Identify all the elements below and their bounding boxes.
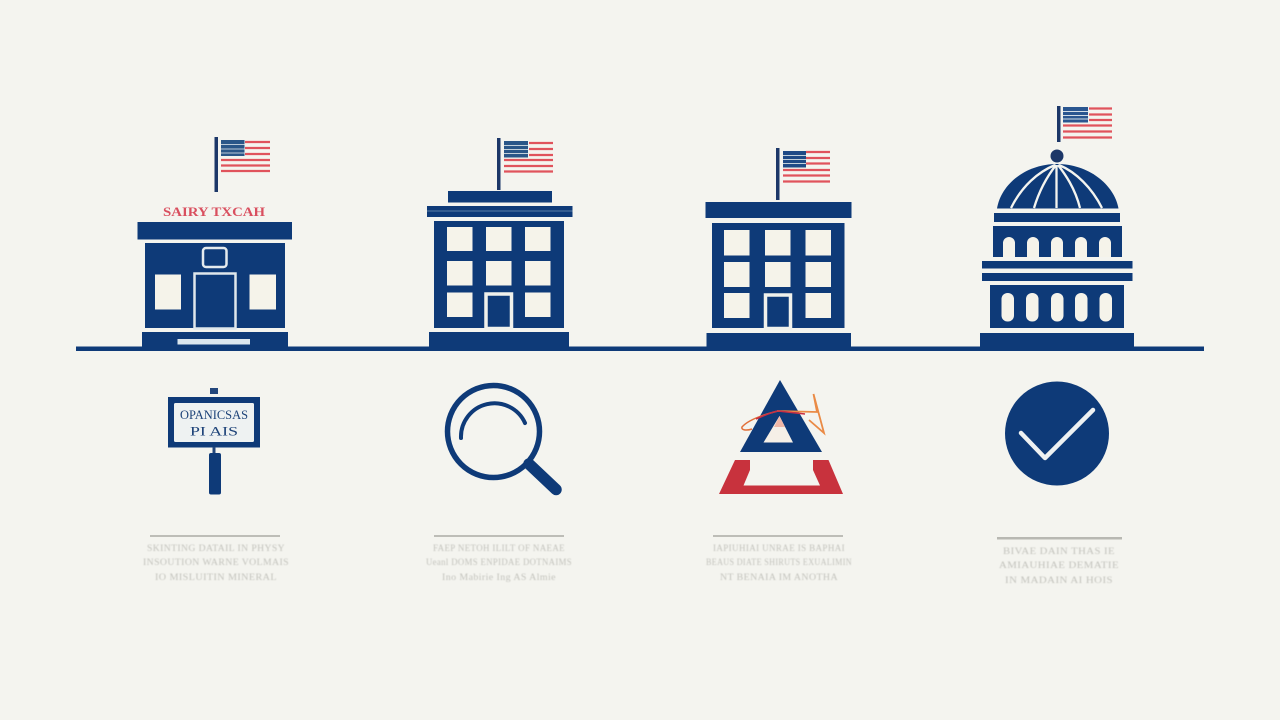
base xyxy=(706,333,851,351)
building 2: office with upper roof tier xyxy=(427,138,572,351)
right window xyxy=(250,274,276,310)
windows xyxy=(724,230,831,318)
door xyxy=(486,294,512,328)
icon: magnifying glass xyxy=(448,386,556,490)
facade xyxy=(712,223,844,328)
icon: signpost: PI AIS xyxy=(190,424,238,438)
flag 4 xyxy=(1063,107,1112,138)
caption 4: IN MADAIN AI HOIS xyxy=(1005,576,1113,586)
icon: check mark badge xyxy=(1005,382,1109,486)
icon: triangle with red base xyxy=(719,380,843,494)
caption 1: IO MISLUITIN MINERAL xyxy=(155,573,277,583)
building 3: office with flat roof xyxy=(706,148,852,351)
signpost text: OPANICSAS xyxy=(180,407,248,422)
flag pole 2 xyxy=(497,138,500,190)
caption 4: AMIAUHIAE DEMATIE xyxy=(999,561,1119,571)
red building sign text: SAIRY TXCAH xyxy=(163,204,265,219)
caption 3: NT BENAIA IM ANOTHA xyxy=(720,573,838,583)
facade xyxy=(145,243,285,328)
caption 2: Ino Mabirie Ing AS Almie xyxy=(442,573,556,583)
caption 1: SKINTING DATAIL IN PHYSY xyxy=(147,544,285,554)
upper arcade xyxy=(993,226,1122,257)
dome band xyxy=(994,213,1120,222)
roof xyxy=(427,206,572,217)
flag pole 4 xyxy=(1057,106,1060,142)
flag pole 3 xyxy=(776,148,780,200)
roof xyxy=(706,202,852,218)
caption 2: Ueanl DOMS ENPIDAE DOTNAIMS xyxy=(426,558,572,568)
flag 1 xyxy=(221,140,270,171)
caption 3: BEAUS DIATE SHIRUTS EXUALIMIN xyxy=(706,558,852,568)
building 1: storefront office xyxy=(138,137,292,351)
roof xyxy=(138,222,292,240)
dome finial xyxy=(1050,150,1064,162)
entablature bands xyxy=(982,261,1132,268)
caption 1 xyxy=(143,535,289,583)
facade xyxy=(434,221,564,328)
caption 3 xyxy=(706,535,852,583)
caption 4: BIVAE DAIN THAS IE xyxy=(1003,547,1115,557)
caption 3: IAPIUHIAI UNRAE IS BAPHAI xyxy=(713,544,845,554)
flag 2 xyxy=(504,141,553,172)
base xyxy=(980,333,1134,351)
monitor above door xyxy=(203,248,226,267)
caption 1: INSOUTION WARNE VOLMAIS xyxy=(143,558,289,568)
left window xyxy=(155,274,181,310)
door xyxy=(194,274,236,328)
windows xyxy=(447,227,550,317)
orange sketch line xyxy=(742,411,778,430)
caption 2: FAEP NETOH ILILT OF NAEAE xyxy=(433,544,565,554)
upper roof tier xyxy=(448,191,552,202)
base xyxy=(429,332,569,351)
dome xyxy=(997,164,1118,208)
ground line xyxy=(76,346,1204,351)
door xyxy=(766,295,790,328)
base with step xyxy=(142,332,288,351)
lower colonnade xyxy=(990,285,1124,328)
flag 3 xyxy=(783,151,830,182)
icon: signpost xyxy=(168,388,260,494)
flag pole 1 xyxy=(214,137,218,192)
red trapezoid base xyxy=(719,460,843,494)
building 4: capitol dome xyxy=(980,106,1134,351)
caption 4 xyxy=(997,537,1122,586)
caption 2 xyxy=(426,535,572,583)
